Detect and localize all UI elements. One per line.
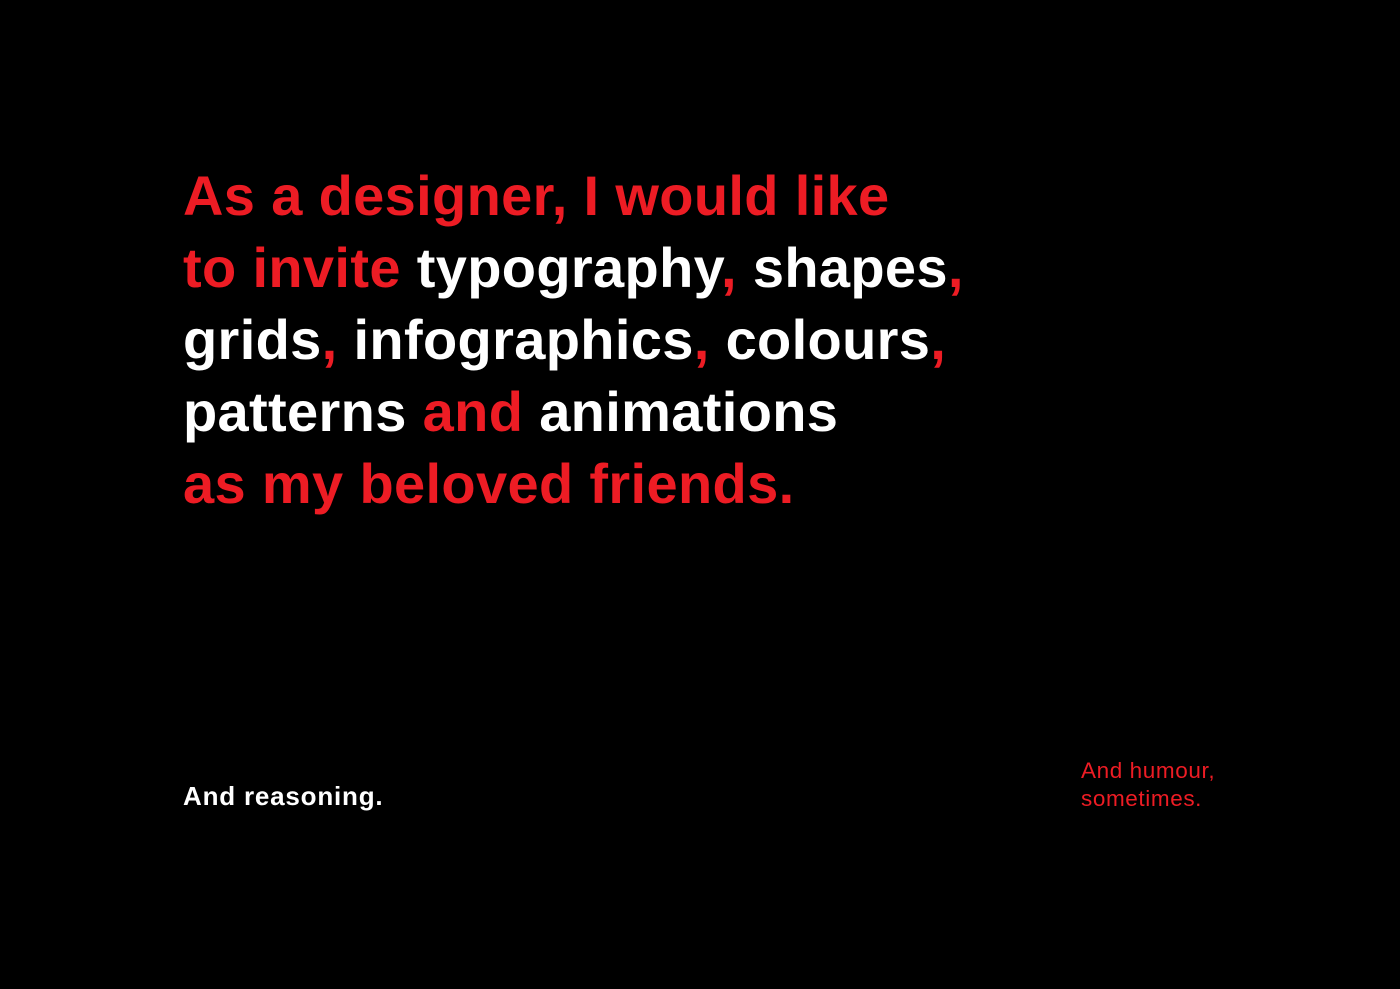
line 5: as my beloved friends. xyxy=(183,452,794,515)
line 4: patterns and animations xyxy=(183,380,838,443)
line 3: grids, infographics, colours, xyxy=(183,308,946,371)
text: and humour: sometimes. xyxy=(1081,786,1202,811)
headline statement xyxy=(183,164,964,515)
line 2: to invite typography, shapes, xyxy=(183,236,964,299)
text: and humour xyxy=(1081,758,1215,811)
text: and reasoning: And reasoning. xyxy=(183,781,383,811)
line 1: As a designer, I would like xyxy=(183,164,890,227)
text: and humour: And humour, xyxy=(1081,758,1215,783)
